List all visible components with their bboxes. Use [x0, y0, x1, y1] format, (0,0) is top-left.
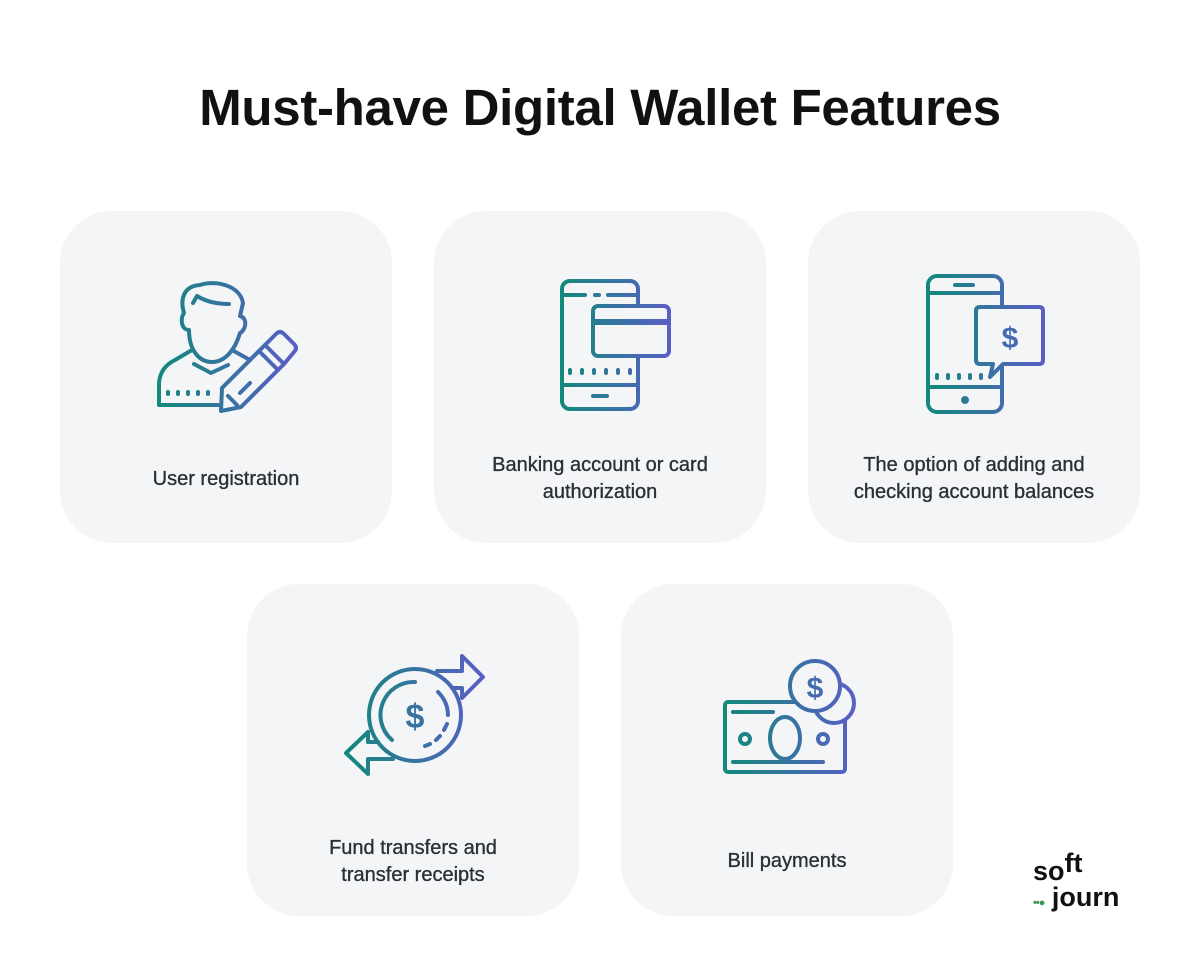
icon: bill with coins: $ — [807, 672, 824, 705]
label: balances — [854, 454, 1094, 503]
label: balances: checking account balances — [854, 481, 1094, 503]
logo: softjourn: ••● journ — [1033, 882, 1119, 912]
panel: user registration — [60, 211, 392, 543]
label: transfers: transfer receipts — [341, 864, 485, 886]
icon: transfer coin with arrows: $ — [406, 698, 425, 736]
label: banking: Banking account or card — [492, 454, 708, 476]
panel: bill payments — [621, 584, 953, 916]
label: banking — [492, 454, 708, 503]
logo: softjourn — [1033, 848, 1119, 912]
label: banking: authorization — [543, 481, 657, 503]
icon: phone with dollar bubble — [928, 276, 1043, 412]
icon: user with pencil — [159, 283, 296, 411]
label: bill: Bill payments — [728, 850, 846, 872]
label: user registration: User registration — [153, 468, 299, 490]
panel: banking — [434, 211, 766, 543]
icon: phone with dollar bubble: $ — [1002, 322, 1019, 355]
icon: bill with coins — [725, 661, 854, 772]
label: balances: The option of adding and — [863, 454, 1085, 476]
label: transfers — [329, 837, 497, 886]
logo: softjourn: soft — [1033, 848, 1082, 886]
title: Must-have Digital Wallet Features — [199, 79, 1001, 136]
label: transfers: Fund transfers and — [329, 837, 497, 859]
panel: transfers — [247, 584, 579, 916]
icon: transfer coin with arrows — [346, 656, 483, 774]
icon: phone with card — [562, 281, 669, 409]
panel: balances — [808, 211, 1140, 543]
